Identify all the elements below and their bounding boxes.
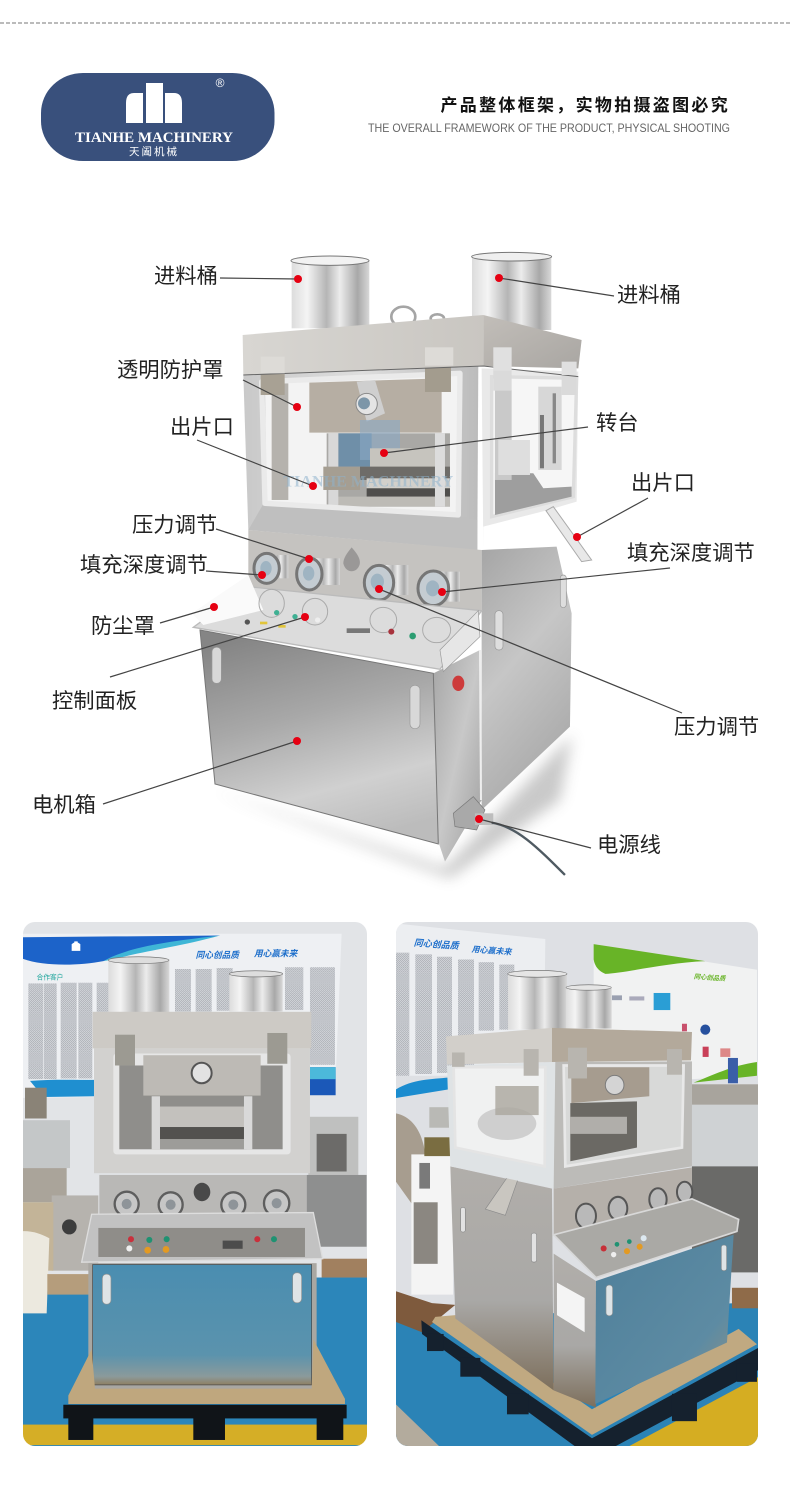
callout: fill depth left: 填充深度调节 bbox=[80, 553, 208, 577]
knob centres bbox=[260, 561, 439, 596]
callout: feed hopper right bbox=[495, 274, 681, 307]
neighbouring machines bbox=[20, 1088, 368, 1313]
callout: fill depth right bbox=[438, 541, 755, 596]
callout: power cable: 电源线 bbox=[597, 833, 661, 857]
callout: feed hopper left: 进料桶 bbox=[154, 264, 218, 288]
floor bbox=[20, 1278, 373, 1428]
pallet wood bbox=[68, 1339, 345, 1404]
logo Chinese name: 天阖机械 bbox=[129, 145, 179, 158]
machine upper section bbox=[243, 252, 592, 562]
top cap bbox=[446, 1028, 692, 1064]
door bbox=[93, 1265, 312, 1385]
callout: control panel bbox=[52, 613, 309, 713]
callout: motor box bbox=[32, 737, 301, 817]
spray can bbox=[728, 1058, 738, 1083]
client logos bbox=[612, 993, 730, 1057]
photo: front view bbox=[20, 915, 373, 1455]
callout: turret: 转台 bbox=[596, 411, 639, 435]
logo: Tianhe Machinery bbox=[41, 73, 274, 161]
control console bbox=[192, 575, 482, 672]
callout: pressure adjust right bbox=[375, 585, 759, 739]
top plate bbox=[309, 378, 442, 433]
drop plate bbox=[343, 547, 360, 571]
vent bbox=[557, 1283, 585, 1332]
lower body band bbox=[248, 504, 477, 550]
console buttons bbox=[126, 1236, 277, 1254]
hinge tabs over cap bbox=[261, 347, 577, 375]
wall poster bbox=[20, 934, 342, 1098]
door handles bbox=[606, 1245, 727, 1316]
turret bbox=[323, 420, 450, 507]
front upper body bbox=[554, 1061, 692, 1189]
window frame bbox=[262, 373, 460, 515]
right window bbox=[564, 1065, 684, 1166]
right poster bbox=[594, 960, 757, 1079]
callout: pressure adjust left bbox=[132, 513, 313, 563]
hoppers bbox=[508, 970, 612, 1030]
top cap bbox=[243, 315, 582, 377]
box door bbox=[200, 630, 438, 844]
machine diagram bbox=[192, 252, 592, 878]
photo: angled view bbox=[392, 915, 765, 1459]
power cable bbox=[492, 823, 565, 875]
console bbox=[82, 1213, 323, 1262]
callout: pressure adjust left: 压力调节 bbox=[132, 513, 217, 537]
machine lower section bbox=[192, 530, 572, 875]
neighbouring equipment bbox=[396, 1084, 759, 1332]
upper body side bbox=[482, 368, 578, 548]
chute bbox=[485, 1178, 518, 1216]
hopper left bbox=[291, 256, 369, 328]
poster logo bbox=[72, 941, 80, 951]
discharge chute bbox=[546, 507, 592, 562]
callout: motor box: 电机箱 bbox=[32, 793, 96, 817]
knob panel bbox=[248, 530, 482, 612]
knob barrels bbox=[268, 555, 460, 602]
window interior bbox=[265, 375, 458, 515]
callout: tablet outlet left: 出片口 bbox=[170, 415, 234, 439]
top cap bbox=[93, 1012, 311, 1048]
pallet bbox=[421, 1315, 759, 1459]
hopper right bbox=[472, 252, 552, 330]
poster subheading: 合作客户 bbox=[37, 972, 63, 981]
side window bbox=[492, 377, 577, 517]
knobs bbox=[576, 1182, 692, 1228]
box side bbox=[433, 650, 482, 862]
callout: pressure adjust right: 压力调节 bbox=[674, 715, 759, 739]
callout: tablet outlet right: 出片口 bbox=[631, 471, 695, 495]
door bbox=[595, 1235, 734, 1404]
client name columns bbox=[396, 953, 514, 1076]
callout: fill depth right: 填充深度调节 bbox=[627, 541, 755, 565]
conduit bbox=[477, 650, 484, 800]
console reflections bbox=[259, 589, 451, 643]
hinges bbox=[261, 367, 577, 395]
hoppers bbox=[108, 957, 283, 1012]
floor bbox=[392, 1301, 765, 1455]
callout: transparent guard bbox=[117, 358, 301, 411]
heading: Chinese: 产品整体框架，实物拍摄盗图必究 bbox=[440, 95, 730, 115]
client name columns bbox=[28, 967, 335, 1079]
upper body front bbox=[243, 367, 478, 550]
side handles bbox=[495, 575, 566, 650]
heading: English: THE OVERALL FRAMEWORK OF THE PRODUCT, PHYSICAL SHOOTING bbox=[368, 121, 730, 135]
door handles bbox=[102, 1273, 302, 1304]
poster slogan 2: 用心赢未来 bbox=[254, 949, 298, 959]
callout: control panel: 控制面板 bbox=[52, 689, 137, 713]
poster slogan: 同心创品质 bbox=[196, 950, 240, 960]
left poster bbox=[396, 924, 545, 1076]
power connector bbox=[453, 797, 493, 830]
hinges bbox=[452, 1048, 682, 1078]
callout: tablet outlet right bbox=[573, 471, 695, 541]
callout: turret bbox=[380, 411, 639, 457]
feeder disc bbox=[478, 1107, 536, 1140]
registered mark: ® bbox=[216, 76, 225, 90]
callout: tablet outlet left bbox=[170, 415, 317, 490]
callout: feed hopper left bbox=[154, 264, 302, 288]
callout: transparent guard: 透明防护罩 bbox=[117, 358, 224, 382]
logo wordmark: TIANHE MACHINERY bbox=[75, 130, 233, 146]
watermark: TIANHE MACHINERY bbox=[283, 474, 454, 491]
door handles bbox=[212, 647, 420, 729]
knob centres bbox=[122, 1198, 282, 1210]
right side body bbox=[482, 547, 572, 810]
icon: logo building bars bbox=[126, 83, 182, 123]
upper body bbox=[94, 1048, 310, 1173]
knobs bbox=[254, 553, 449, 606]
lower front corner bbox=[554, 1254, 596, 1407]
callout: fill depth left bbox=[80, 553, 266, 579]
top dashed line bbox=[0, 22, 790, 24]
drop plate bbox=[194, 1183, 210, 1201]
left poster slogan: 同心创品质 bbox=[414, 938, 461, 951]
knob panel bbox=[554, 1167, 692, 1235]
side handles bbox=[461, 1207, 537, 1262]
left lower side bbox=[450, 1166, 554, 1390]
knob panel bbox=[99, 1175, 307, 1214]
console bbox=[554, 1199, 739, 1278]
emergency stop button bbox=[452, 676, 464, 691]
lifting rings bbox=[391, 307, 444, 327]
pallet bbox=[63, 1405, 347, 1440]
lower frame bbox=[88, 1263, 317, 1389]
left poster slogan 2: 用心赢未来 bbox=[471, 945, 513, 957]
right poster slogan: 同心创品质 bbox=[693, 973, 727, 983]
cam arm and knob bbox=[356, 380, 385, 422]
console buttons bbox=[601, 1235, 647, 1257]
floor shadow bbox=[212, 735, 572, 878]
callout: power cable bbox=[475, 815, 661, 857]
console buttons bbox=[245, 610, 416, 639]
upper left glass bbox=[447, 1062, 555, 1189]
window bbox=[113, 1033, 291, 1154]
callout: dust cover bbox=[91, 603, 218, 638]
knobs bbox=[115, 1190, 289, 1217]
callout: feed hopper right: 进料桶 bbox=[617, 283, 681, 307]
callout: dust cover: 防尘罩 bbox=[91, 614, 155, 638]
